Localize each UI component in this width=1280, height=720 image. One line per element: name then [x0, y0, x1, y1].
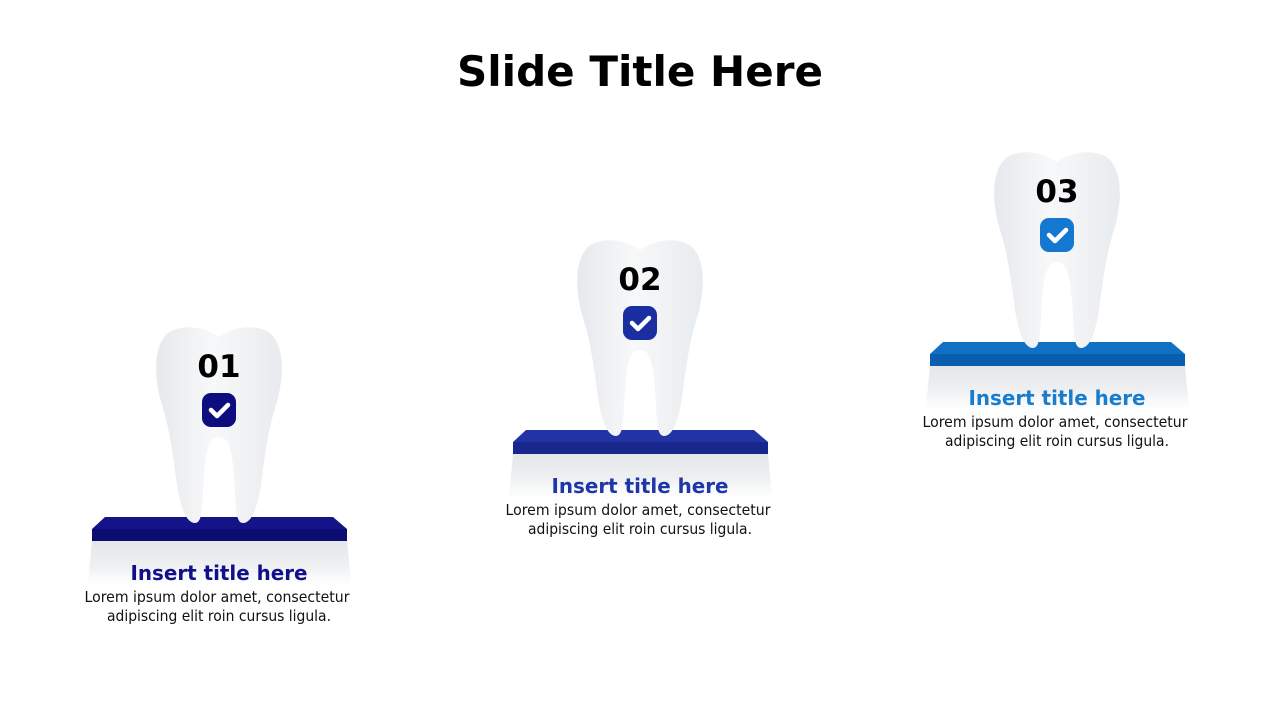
check icon 3: [1040, 218, 1074, 252]
tooth 3: [994, 152, 1120, 348]
platform 1: [92, 517, 347, 541]
title: Slide Title Here: [457, 47, 823, 96]
number 02: 02: [618, 262, 662, 298]
step 2: [506, 240, 773, 538]
text 3: [922, 413, 1188, 450]
number 03: 03: [1035, 174, 1079, 210]
title 1: Insert title here: [130, 561, 308, 585]
step 1: [84, 327, 352, 625]
tooth 2: [577, 240, 703, 436]
title 3: Insert title here: [968, 386, 1146, 410]
check icon 1: [202, 393, 236, 427]
text 2: adipiscing elit roin cursus ligula.: [528, 520, 752, 538]
number 01: 01: [197, 349, 241, 385]
text 1: Lorem ipsum dolor amet, consectetur: [84, 588, 350, 606]
text 3: adipiscing elit roin cursus ligula.: [945, 432, 1169, 450]
text 1: adipiscing elit roin cursus ligula.: [107, 607, 331, 625]
text 1: [84, 588, 350, 625]
text 2: Lorem ipsum dolor amet, consectetur: [506, 501, 771, 519]
text 2: [506, 501, 771, 538]
tooth 1: [156, 327, 282, 523]
platform 3: [930, 342, 1185, 366]
shadow 1: [87, 541, 352, 592]
shadow 2: [508, 454, 773, 505]
check icon 2: [623, 306, 657, 340]
title 2: Insert title here: [552, 474, 728, 498]
text 3: Lorem ipsum dolor amet, consectetur: [922, 413, 1188, 431]
step 3: [922, 152, 1190, 450]
platform 2: [513, 430, 768, 454]
shadow 3: [925, 366, 1190, 417]
